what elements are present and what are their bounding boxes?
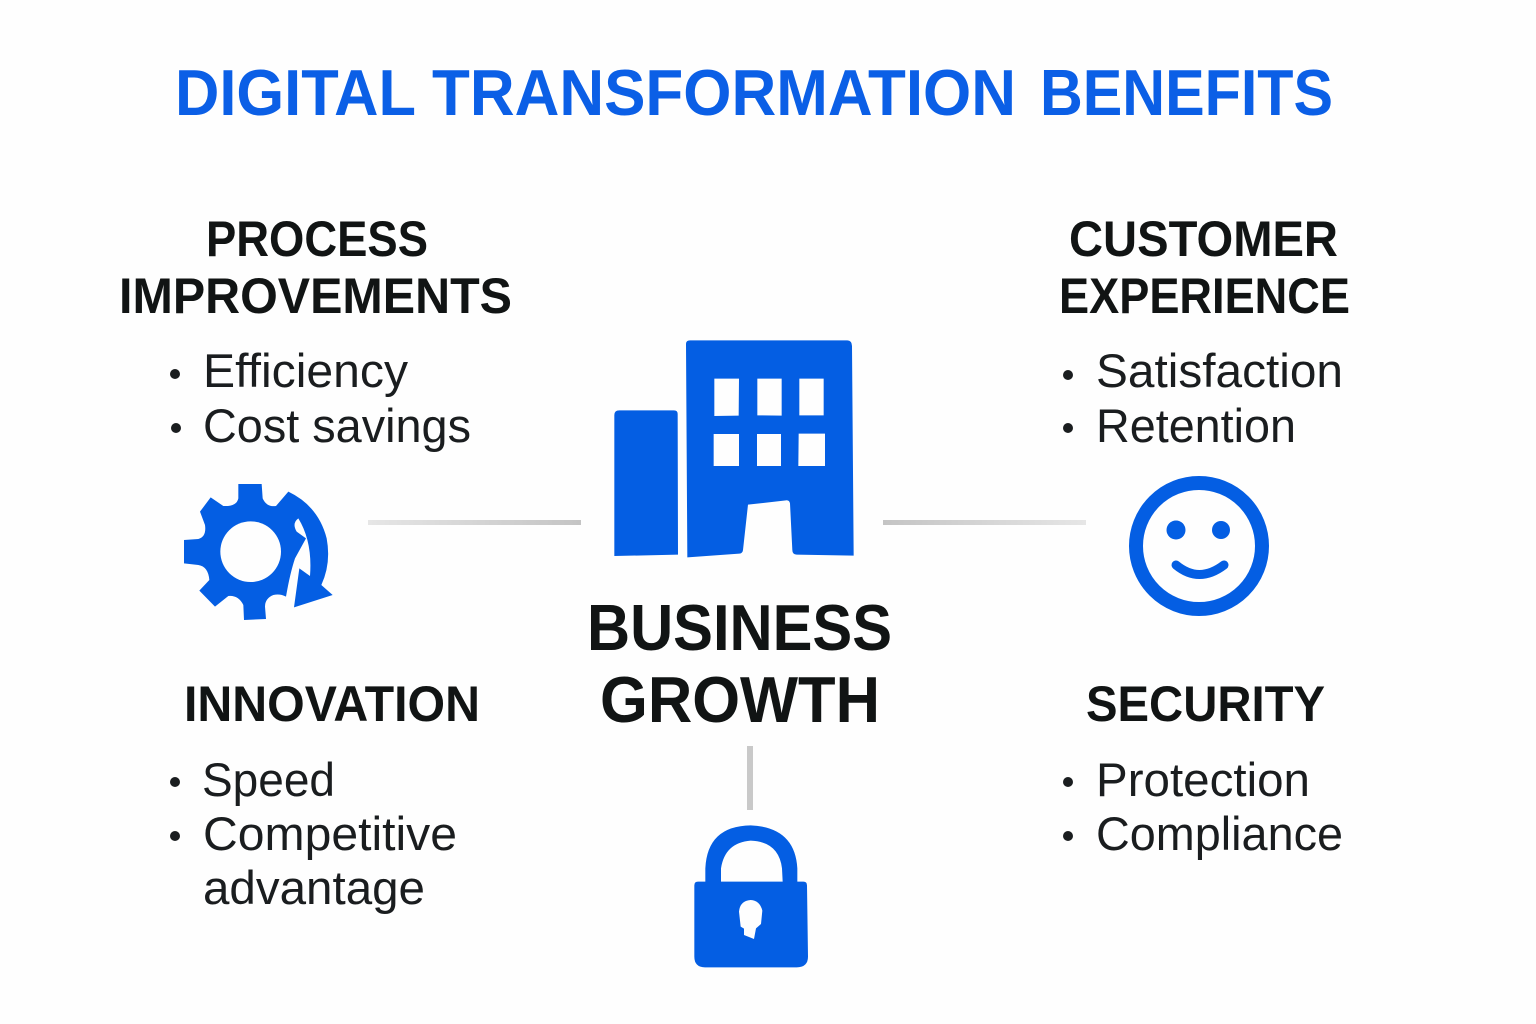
list: innovation: Competitive	[203, 807, 457, 860]
list: customer experience: Satisfaction	[1096, 344, 1343, 397]
list: innovation: Speed	[202, 753, 335, 806]
icon: padlock	[694, 825, 808, 967]
center label: business growth: BUSINESS	[587, 591, 892, 664]
connector: bottom	[747, 746, 753, 810]
connector: right	[883, 520, 1086, 525]
panel: security	[1063, 676, 1343, 860]
title	[175, 56, 1333, 129]
title: DIGITAL	[175, 56, 416, 129]
list: customer experience: Retention	[1096, 399, 1296, 452]
list: process improvements	[170, 344, 471, 452]
center label: business growth: GROWTH	[600, 663, 880, 736]
heading: process improvements: IMPROVEMENTS	[119, 268, 512, 324]
panel: innovation	[170, 676, 480, 914]
icon: gear with arrow	[184, 484, 333, 620]
list: security: Protection	[1096, 753, 1310, 806]
list: security: Compliance	[1096, 807, 1343, 860]
panel: process improvements	[119, 211, 512, 620]
heading: customer experience	[1059, 211, 1350, 324]
list: innovation	[170, 753, 457, 914]
icon: smiley face	[1136, 483, 1262, 609]
heading: innovation: INNOVATION	[184, 676, 480, 732]
title: TRANSFORMATION	[432, 56, 1016, 129]
icon: office building	[614, 340, 854, 557]
heading: customer experience: CUSTOMER	[1069, 211, 1338, 267]
list: customer experience	[1063, 344, 1343, 452]
list: security	[1063, 753, 1343, 860]
heading: process improvements: PROCESS	[206, 211, 428, 267]
list: process improvements: Cost savings	[203, 399, 471, 452]
list: innovation: advantage	[203, 861, 425, 914]
center label: business growth	[587, 591, 892, 736]
title: BENEFITS	[1040, 56, 1333, 129]
heading: customer experience: EXPERIENCE	[1059, 268, 1350, 324]
panel: customer experience	[1059, 211, 1350, 609]
list: process improvements: Efficiency	[203, 344, 409, 397]
heading: process improvements	[119, 211, 512, 324]
heading: security: SECURITY	[1086, 676, 1325, 732]
connector: left	[368, 520, 581, 525]
